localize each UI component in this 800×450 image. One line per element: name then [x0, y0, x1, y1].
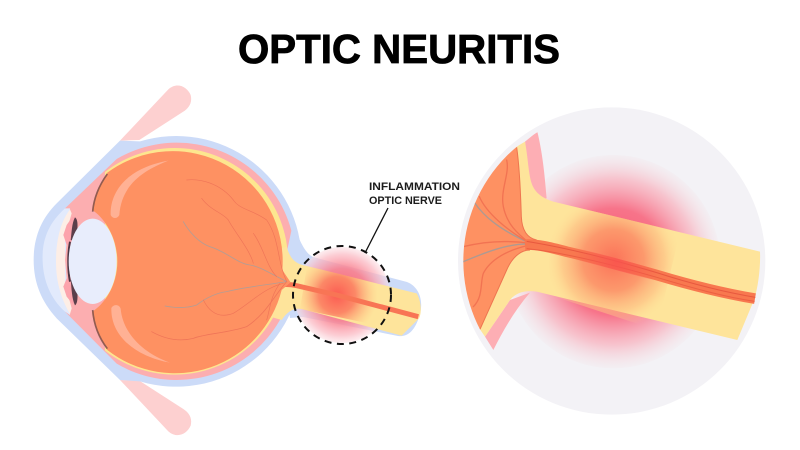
nerve inflamed: [555, 210, 672, 322]
dashed magnifier circle: [293, 246, 391, 344]
nerve inflamed: [300, 266, 400, 330]
central vessel: [525, 245, 755, 299]
eye interior: [43, 151, 291, 373]
retinal vessels: [152, 180, 287, 340]
highlight: upper: [111, 161, 168, 218]
eye cross-section diagram: [34, 86, 302, 435]
inflammation halo: [294, 247, 390, 343]
aqueous chamber: [56, 209, 72, 314]
magnified background circle: [458, 107, 765, 415]
lens: [69, 219, 117, 304]
choroid pink: [485, 132, 547, 350]
retina orange: [463, 146, 533, 330]
label: inflammation optic nerve: [369, 181, 460, 207]
iris: upper pink: [63, 217, 77, 245]
retina yellow ring: [105, 148, 288, 375]
retina boundary: [480, 147, 537, 329]
muscle: lower: [120, 380, 191, 435]
optic nerve sheath: [283, 223, 421, 336]
nerve body: [480, 142, 760, 340]
retinal vessels: [463, 160, 530, 307]
title: OPTIC NEURITIS: [238, 26, 560, 72]
nerve body: [270, 247, 421, 336]
vessel hot core: [567, 252, 667, 278]
iris: dark lower: [71, 278, 78, 305]
highlight: lower: [111, 305, 170, 363]
label: inflammation optic nerve: INFLAMMATION: [369, 181, 460, 193]
muscle: upper: [120, 86, 191, 141]
sclera outer layer: [34, 136, 302, 387]
cornea inner: [43, 208, 70, 315]
leader line: [365, 208, 388, 253]
inflammation glow: [507, 155, 720, 368]
edge shading: [93, 174, 107, 349]
label: inflammation optic nerve: OPTIC NERVE: [369, 195, 442, 207]
central vessel: [280, 285, 418, 317]
iris: dark upper: [71, 217, 78, 242]
pupil edge: [68, 242, 70, 282]
iris: lower pink: [63, 278, 77, 304]
choroid pink layer: [65, 143, 295, 380]
vitreous body: [92, 151, 291, 373]
magnified view panel: [450, 107, 765, 415]
vessel lines: [527, 241, 755, 297]
